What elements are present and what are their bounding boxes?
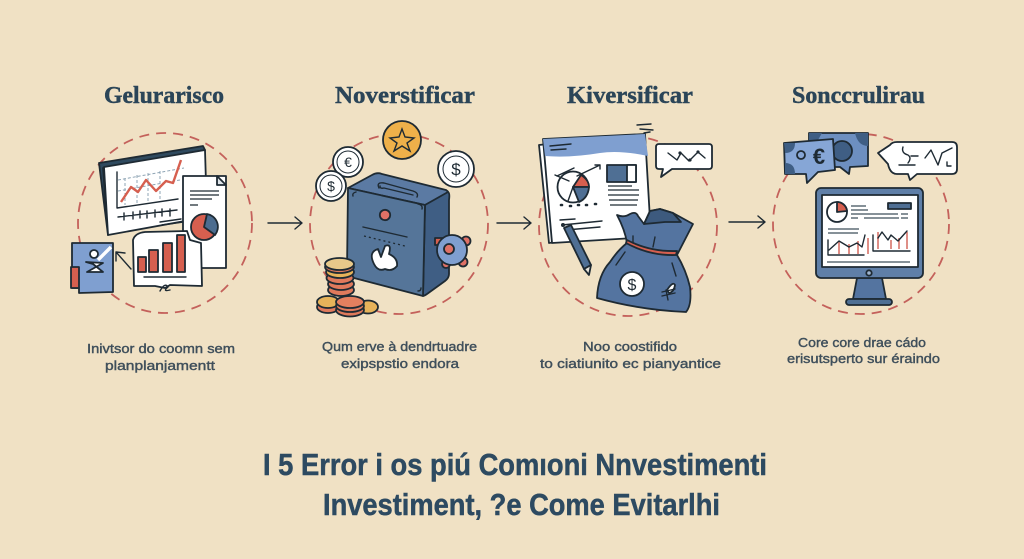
- icon: dollar coin left: [316, 171, 346, 201]
- description: step 1: planplanjamentt: [105, 358, 215, 373]
- dashed circle: step 1: [78, 133, 252, 313]
- description: step 4: Core core drae cádo: [798, 335, 926, 350]
- icon: dollar coin right: $: [451, 160, 461, 179]
- title: I 5 Error i os piú Comıoni Nnvestimenti: [263, 447, 767, 482]
- icon: document with pie: [539, 134, 651, 243]
- icon: back banknote: [809, 133, 868, 174]
- description: step 1: Inivtsor do coomn sem: [87, 341, 235, 356]
- icon: money bag: [597, 209, 693, 312]
- icon: chart board: [99, 146, 207, 235]
- icon: monitor: [816, 188, 923, 305]
- icon: euro coin: €: [344, 154, 352, 170]
- arrow: to folder: [116, 252, 131, 269]
- dashed circle: step 4: [773, 134, 949, 314]
- icon: dollar coin right: [438, 151, 474, 187]
- heading: step 1: Gelurarisco: [104, 83, 224, 109]
- icon: dollar coin left: $: [327, 178, 335, 194]
- description: step 2: Qum erve à dendrtuadre: [322, 339, 477, 354]
- heading: step 3: Kiversificar: [567, 83, 693, 109]
- description: step 3: to ciatiunito ec pianyantice: [540, 356, 721, 371]
- title: Investiment, ?e Come Evitarlhi: [323, 487, 720, 522]
- description: step 1: [87, 341, 235, 373]
- icon: gear: [435, 235, 470, 268]
- description: step 4: erisutsperto sur éraindo: [787, 351, 940, 366]
- icon: speech bubble: [656, 144, 712, 177]
- icon: bar chart note: [133, 219, 202, 291]
- icon: gold star coin: [383, 121, 421, 159]
- arrow: step 2 to 3: [497, 217, 531, 229]
- icon: money bag: $: [628, 277, 637, 294]
- description: step 3: [540, 339, 721, 371]
- dashed circle: step 3: [539, 136, 717, 316]
- panel: step 2 diversify: [310, 83, 488, 371]
- icon: euro coin: [333, 147, 363, 177]
- description: step 2: [322, 339, 477, 371]
- icon: front banknote: €: [813, 144, 825, 169]
- arrow: step 1 to 2: [268, 217, 302, 229]
- panel: step 1 planning: [71, 83, 252, 373]
- heading: step 4: Sonccrulirau: [792, 83, 925, 109]
- panel: step 4 monitoring: [773, 83, 957, 366]
- description: step 4: [787, 335, 940, 366]
- heading: step 2: Noverstificar: [335, 83, 475, 109]
- description: step 2: exipspstio endora: [341, 356, 460, 371]
- icon: report with pie chart: [183, 176, 226, 268]
- dashed circle: step 2: [310, 134, 488, 314]
- arrow: step 3 to 4: [729, 216, 765, 228]
- icon: blue folder with figure: [71, 243, 113, 293]
- icon: coin stacks: [317, 258, 378, 316]
- icon: pen: [561, 223, 591, 275]
- icon: front banknote: [784, 139, 835, 183]
- icon: speech bubble chart: [878, 142, 957, 180]
- icon: blue suitcase: [347, 173, 449, 296]
- icon: strokes above document: [637, 124, 653, 133]
- title: [263, 447, 767, 522]
- panel: step 3 documents and money: [539, 83, 721, 371]
- description: step 3: Noo coostifido: [583, 339, 677, 354]
